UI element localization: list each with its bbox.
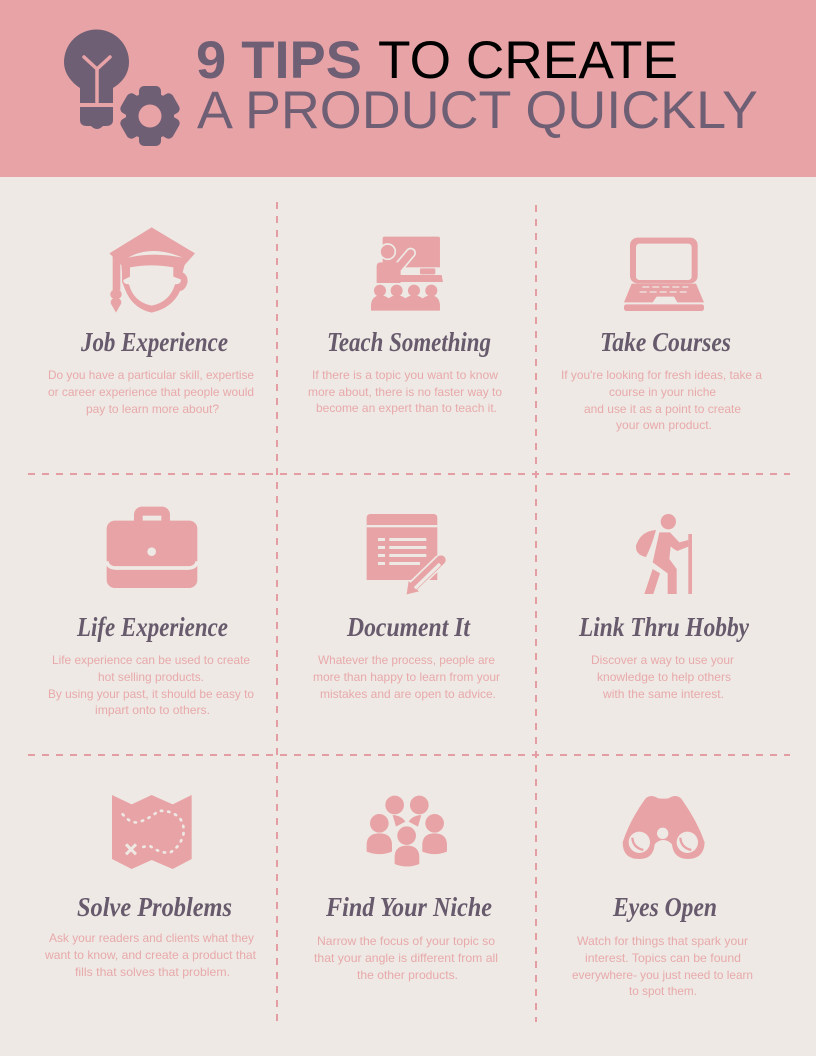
icon: binoculars	[623, 796, 705, 859]
icon: treasure map	[112, 795, 192, 869]
icon: light bulb	[64, 30, 129, 129]
body text: your own product.	[616, 418, 712, 432]
panel: take courses	[561, 238, 762, 432]
body text: that your angle is different from all	[314, 951, 498, 965]
body text: course in your niche	[609, 385, 716, 399]
body text	[44, 931, 257, 979]
header banner	[0, 0, 816, 177]
panel: life experience	[48, 507, 254, 717]
body text: want to know, and create a product that	[44, 948, 257, 962]
body text: hot selling products.	[98, 670, 204, 684]
body text: more than happy to learn from your	[313, 670, 500, 684]
body text: Do you have a particular skill, expertise	[48, 368, 254, 382]
body text: Watch for things that spark your	[577, 934, 748, 948]
title: TO CREATE	[378, 31, 678, 90]
body text	[561, 368, 762, 432]
panel: find your niche	[314, 796, 498, 982]
body text: and use it as a point to create	[584, 402, 741, 416]
body text	[314, 934, 498, 982]
title: 9 TIPS	[196, 31, 362, 90]
body text: knowledge to help others	[597, 670, 731, 684]
heading: Teach Something	[327, 327, 491, 357]
title: A PRODUCT QUICKLY	[197, 81, 758, 140]
icon: hiker	[636, 514, 692, 594]
panel: eyes open	[572, 796, 753, 998]
body text: fills that solves that problem.	[75, 965, 230, 979]
panel: document it	[313, 514, 500, 701]
body text: the other products.	[357, 968, 458, 982]
body text: Discover a way to use your	[591, 653, 734, 667]
heading: Life Experience	[76, 612, 228, 642]
title	[196, 31, 758, 140]
body text: everywhere- you just need to learn	[572, 968, 753, 982]
heading: Link Thru Hobby	[578, 612, 750, 642]
body text: impart onto to others.	[95, 703, 210, 717]
icon: group of people	[367, 796, 447, 866]
body text: pay to learn more about?	[86, 402, 219, 416]
heading: Take Courses	[600, 327, 731, 357]
body text: interest. Topics can be found	[585, 951, 741, 965]
body text: mistakes and are open to advice.	[320, 687, 496, 701]
body text	[591, 653, 734, 701]
icon: graduation cap	[109, 227, 195, 313]
body text	[308, 368, 502, 415]
icon: document and pencil	[367, 514, 441, 594]
panel: job experience	[48, 227, 254, 416]
body text: more about, there is no faster way to	[308, 385, 502, 399]
body text: Whatever the process, people are	[318, 653, 495, 667]
body text: or career experience that people would	[48, 385, 254, 399]
icon: laptop	[624, 238, 704, 311]
body text	[572, 934, 753, 998]
heading: Find Your Niche	[325, 892, 492, 922]
body text: to spot them.	[629, 984, 697, 998]
heading: Solve Problems	[77, 892, 232, 922]
body text	[48, 653, 254, 717]
panel: link thru hobby	[578, 514, 750, 701]
icon: gear	[119, 86, 181, 146]
body text: Life experience can be used to create	[52, 653, 250, 667]
body text: Narrow the focus of your topic so	[317, 934, 495, 948]
icon: teacher at board	[370, 237, 443, 311]
panel: teach something	[308, 237, 502, 415]
body text: become an expert than to teach it.	[316, 401, 497, 415]
body text: By using your past, it should be easy to	[48, 687, 254, 701]
body text	[313, 653, 500, 701]
icon: briefcase	[107, 507, 197, 588]
body text: Ask your readers and clients what they	[49, 931, 254, 945]
body text: If you're looking for fresh ideas, take a	[561, 368, 762, 382]
body text	[48, 368, 254, 416]
panel: solve problems	[44, 795, 257, 979]
body text: with the same interest.	[602, 687, 724, 701]
heading: Eyes Open	[612, 892, 717, 922]
heading: Job Experience	[80, 327, 228, 357]
body text: If there is a topic you want to know	[312, 368, 498, 382]
heading: Document It	[346, 612, 471, 642]
